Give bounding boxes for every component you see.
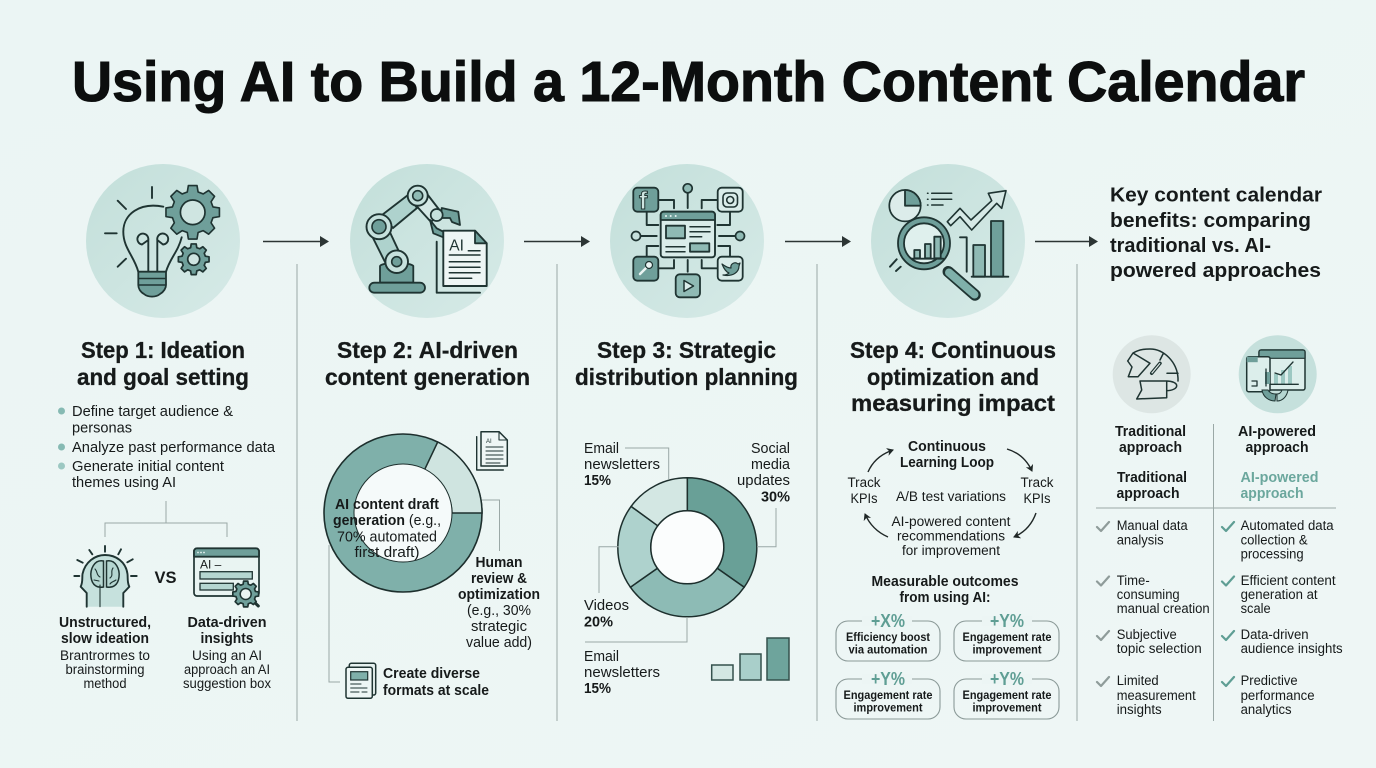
- diagram: continuous learning loop: for improvement: [902, 543, 1000, 558]
- icon: analytics magnifier: [871, 164, 1025, 318]
- checklist: AI-powered: Automated data: [1241, 518, 1334, 533]
- diagram: continuous learning loop: KPIs: [1024, 491, 1051, 506]
- label: human review: value add): [466, 635, 532, 651]
- column title: traditional: approach: [1116, 486, 1180, 502]
- bullet list: step 1 tasks: Analyze past performance data: [72, 440, 276, 456]
- checklist: AI-powered: [1222, 518, 1343, 717]
- table dividers: [1096, 424, 1336, 721]
- card: engagement rate bottom left: [836, 669, 940, 719]
- bullet list: step 1 tasks: Generate initial content: [72, 459, 224, 475]
- donut labels: Videos: [584, 598, 629, 614]
- donut chart: AI vs human share: [324, 434, 482, 592]
- diagram: continuous learning loop: A/B test variations: [896, 489, 1006, 504]
- donut chart: AI vs human share: generation (e.g.,: [333, 513, 441, 529]
- card: efficiency boost: Efficiency boost: [846, 630, 930, 644]
- diagram: continuous learning loop: [848, 439, 1054, 558]
- heading: benefits: traditional vs. AI-: [1110, 234, 1271, 257]
- column head: traditional icon caption: Traditional: [1115, 424, 1186, 440]
- donut labels: Social: [751, 441, 790, 457]
- comparison text: data-driven insights: approach an AI: [184, 662, 270, 677]
- label: human review: optimization: [458, 587, 540, 603]
- checklist: AI-powered: Predictive: [1241, 673, 1298, 688]
- card: engagement rate bottom right: improvement: [972, 700, 1042, 714]
- checklist: traditional: topic selection: [1117, 641, 1202, 656]
- comparison text: unstructured ideation: Brantrormes to: [60, 648, 150, 663]
- label: human review: (e.g., 30%: [467, 603, 531, 619]
- checklist: traditional: manual creation: [1117, 601, 1210, 616]
- bullet list: step 1 tasks: themes using AI: [72, 475, 176, 491]
- card: engagement rate top: improvement: [972, 642, 1042, 656]
- heading: step 1: and goal setting: [77, 364, 249, 390]
- heading: step 3: [575, 337, 798, 390]
- panel: benefits comparison: [1096, 184, 1343, 721]
- checklist: AI-powered: scale: [1241, 601, 1271, 616]
- connector: donut to formats: [329, 545, 340, 682]
- diagram: continuous learning loop: Track: [1020, 475, 1054, 490]
- panel: step 1 ideation: [58, 164, 276, 691]
- card: engagement rate top: [954, 611, 1059, 661]
- checklist: AI-powered: performance: [1241, 688, 1315, 703]
- donut chart: AI vs human share: AI content draft: [335, 497, 439, 513]
- donut labels: 15%: [584, 681, 611, 697]
- checklist: traditional: Time-: [1117, 573, 1150, 588]
- checklist: traditional: Limited: [1117, 673, 1159, 688]
- icon: human head with brain: [74, 546, 137, 607]
- card: engagement rate bottom right: +Y%: [990, 669, 1024, 689]
- label: human review: review &: [471, 571, 527, 587]
- checklist: AI-powered: Efficient content: [1241, 573, 1336, 588]
- donut labels: 30%: [761, 490, 790, 506]
- checklist: traditional: measurement: [1117, 688, 1196, 703]
- heading: step 1: Step 1: Ideation: [81, 337, 245, 363]
- card: efficiency boost: [836, 611, 940, 661]
- column title: AI-powered: approach: [1240, 486, 1304, 502]
- heading: step 1: [77, 337, 249, 390]
- icon: stacked document: AI: [486, 439, 492, 445]
- connector: donut to human review: [482, 500, 500, 551]
- diagram: continuous learning loop: Learning Loop: [900, 455, 994, 471]
- donut labels: newsletters: [584, 665, 660, 681]
- comparison text: unstructured ideation: method: [84, 676, 126, 691]
- heading: benefits: Key content calendar: [1110, 184, 1322, 206]
- panel: step 2 generation: [324, 164, 540, 699]
- diagram: continuous learning loop: KPIs: [850, 491, 878, 506]
- checklist: AI-powered: audience insights: [1241, 641, 1343, 656]
- panel: step 4 optimization: [836, 164, 1059, 719]
- donut labels: newsletters: [584, 457, 660, 473]
- donut labels: Email: [584, 649, 619, 665]
- label: diverse formats: formats at scale: [383, 683, 489, 699]
- comparison text: data-driven insights: Using an AI: [192, 648, 262, 663]
- card: engagement rate bottom left: improvement: [854, 700, 922, 714]
- card: efficiency boost: via automation: [848, 642, 928, 656]
- donut labels: [584, 441, 791, 697]
- card: efficiency boost: +X%: [871, 611, 905, 631]
- checklist: traditional: Subjective: [1117, 627, 1177, 642]
- tree connector: [105, 501, 227, 537]
- diagram: continuous learning loop: AI-powered content: [892, 514, 1011, 529]
- donut labels: Email: [584, 441, 619, 457]
- column dividers: [297, 264, 1077, 721]
- title: Using AI to Build a 12-Month Content Calendar: [72, 50, 1305, 114]
- donut chart: AI vs human share: first draft): [354, 545, 420, 561]
- donut chart: distribution mix: [618, 478, 757, 617]
- heading: step 4: measuring impact: [851, 390, 1055, 416]
- label: diverse formats: [383, 666, 489, 699]
- checklist: AI-powered: analytics: [1241, 702, 1292, 717]
- heading: step 3: distribution planning: [575, 364, 798, 390]
- icon: format pages: [346, 663, 376, 698]
- icon: robot arm and AI document: [350, 164, 504, 318]
- vs label: VS: [154, 569, 177, 587]
- heading: measurable outcomes: from using AI:: [900, 590, 990, 606]
- arrow: step 2 to step 3: [524, 236, 590, 247]
- icon: robot arm and AI document: AI: [449, 238, 464, 255]
- bullet list: step 1 tasks: personas: [72, 420, 132, 436]
- checklist: AI-powered: processing: [1241, 546, 1304, 562]
- heading: measurable outcomes: Measurable outcomes: [872, 574, 1018, 590]
- checklist: traditional: consuming: [1117, 587, 1180, 602]
- icon: light bulb and gears: [86, 164, 240, 318]
- heading: measurable outcomes: [872, 574, 1018, 606]
- card: engagement rate top: +Y%: [990, 611, 1024, 631]
- heading: step 2: content generation: [325, 364, 530, 390]
- heading: step 4: optimization and: [867, 364, 1039, 390]
- comparison text: data-driven insights: insights: [200, 631, 254, 647]
- label: diverse formats: Create diverse: [383, 666, 480, 682]
- card: engagement rate bottom left: Engagement rate: [844, 688, 933, 702]
- heading: benefits: powered approaches: [1110, 259, 1321, 282]
- column head: traditional icon caption: [1115, 424, 1186, 456]
- heading: step 2: Step 2: AI-driven: [337, 337, 518, 363]
- diagram: continuous learning loop: recommendations: [897, 528, 1005, 544]
- donut chart: AI vs human share: 70% automated: [337, 530, 437, 546]
- diagram: continuous learning loop: Continuous: [908, 439, 986, 455]
- donut labels: 20%: [584, 614, 613, 630]
- heading: benefits: benefits: comparing: [1110, 209, 1311, 232]
- icon: social network hub: f: [639, 187, 648, 215]
- card: engagement rate bottom left: +Y%: [871, 669, 905, 689]
- comparison text: unstructured ideation: Unstructured,: [59, 615, 151, 631]
- heading: step 4: Step 4: Continuous: [850, 337, 1056, 363]
- icon: AI suggestion window: AI –: [200, 557, 222, 571]
- label: human review: Human: [476, 555, 522, 571]
- card: engagement rate bottom right: Engagement rate: [962, 688, 1052, 702]
- column title: traditional: [1116, 470, 1187, 502]
- icon: traditional gauge: [1113, 335, 1191, 413]
- arrow: step 4 to benefits: [1035, 236, 1098, 247]
- label: human review: [458, 555, 540, 651]
- heading: step 2: [325, 337, 530, 390]
- bullet list: step 1 tasks: Define target audience &: [72, 404, 233, 420]
- column head: AI-powered icon caption: [1238, 424, 1316, 456]
- arrow: step 3 to step 4: [785, 236, 851, 247]
- checklist: traditional: insights: [1117, 702, 1162, 717]
- card: engagement rate bottom right: [954, 669, 1059, 719]
- heading: benefits: [1110, 184, 1322, 282]
- comparison text: data-driven insights: suggestion box: [183, 676, 271, 691]
- icon: stacked document: [477, 432, 507, 470]
- column head: traditional icon caption: approach: [1119, 440, 1182, 456]
- donut labels: updates: [737, 473, 790, 489]
- column title: traditional: Traditional: [1117, 470, 1187, 486]
- mini bar chart: [712, 638, 789, 680]
- diagram: continuous learning loop: Track: [848, 475, 881, 490]
- donut labels: 15%: [584, 473, 611, 489]
- comparison text: unstructured ideation: [59, 615, 151, 691]
- comparison text: unstructured ideation: brainstorming: [66, 662, 144, 677]
- column head: AI-powered icon caption: approach: [1246, 440, 1308, 456]
- comparison text: data-driven insights: Data-driven: [188, 615, 266, 631]
- comparison text: unstructured ideation: slow ideation: [61, 631, 149, 647]
- checklist: traditional: analysis: [1117, 532, 1164, 548]
- column head: AI-powered icon caption: AI-powered: [1238, 424, 1316, 440]
- bullet list: step 1 tasks: [58, 404, 276, 491]
- arrow: step 1 to step 2: [263, 236, 329, 247]
- checklist: traditional: Manual data: [1117, 518, 1188, 533]
- heading: step 3: Step 3: Strategic: [597, 337, 776, 363]
- panel: step 3 distribution: [575, 164, 798, 697]
- comparison text: data-driven insights: [183, 615, 271, 691]
- column title: AI-powered: AI-powered: [1240, 470, 1318, 486]
- card: engagement rate top: Engagement rate: [962, 630, 1052, 644]
- column title: AI-powered: [1240, 470, 1318, 502]
- label: human review: strategic: [471, 619, 527, 635]
- icon: social network hub: [610, 164, 764, 318]
- icon: AI suggestion window: [194, 548, 259, 607]
- checklist: AI-powered: Data-driven: [1241, 627, 1309, 642]
- checklist: AI-powered: generation at: [1241, 587, 1318, 602]
- heading: step 4: [850, 337, 1056, 416]
- checklist: traditional: [1097, 518, 1210, 717]
- checklist: AI-powered: collection &: [1241, 532, 1308, 548]
- icon: AI dashboard: [1239, 335, 1317, 413]
- donut labels: media: [751, 457, 791, 473]
